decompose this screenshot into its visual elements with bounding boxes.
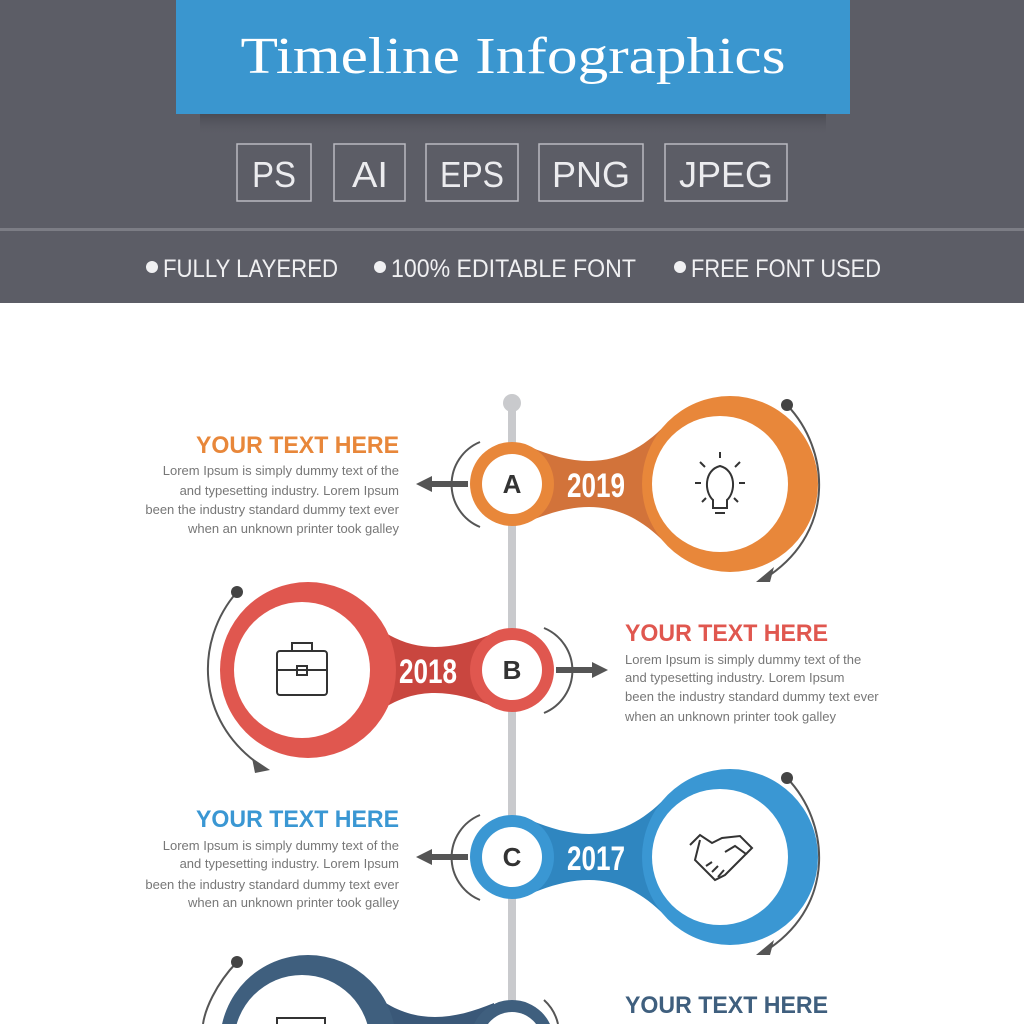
step D	[203, 955, 558, 1024]
text: C: YOUR TEXT HERE	[196, 806, 399, 833]
text: A: and typesetting industry. Lorem Ipsum	[180, 483, 399, 498]
text: C: Lorem Ipsum is simply dummy text of the	[163, 838, 399, 853]
text: A	[145, 432, 400, 536]
format boxes: EPS	[440, 154, 504, 195]
icon: handshake	[690, 835, 752, 880]
step A 2019: A	[503, 469, 522, 499]
feature bullets	[146, 255, 881, 283]
format boxes: PNG	[552, 154, 630, 195]
text: D: YOUR TEXT HERE	[625, 992, 828, 1019]
feature bullets: FULLY LAYERED	[163, 255, 338, 283]
icon: bulb	[695, 452, 745, 513]
format boxes: AI	[352, 154, 388, 195]
step C 2017: 2017	[567, 840, 625, 878]
text: B: YOUR TEXT HERE	[625, 620, 828, 647]
header background	[0, 0, 1024, 303]
format boxes: PS	[252, 154, 296, 195]
text: B: been the industry standard dummy text ever	[625, 689, 879, 704]
feature bullets: FREE FONT USED	[691, 255, 881, 283]
text: C	[145, 806, 400, 910]
title banner: Timeline Infographics	[240, 28, 786, 85]
text: A: YOUR TEXT HERE	[196, 432, 399, 459]
step B 2018: 2018	[399, 653, 457, 691]
vertical timeline line	[503, 394, 521, 1024]
text: B: when an unknown printer took galley	[624, 709, 837, 724]
text: B: Lorem Ipsum is simply dummy text of the	[625, 652, 861, 667]
step A 2019	[416, 396, 819, 582]
step B 2018: B	[503, 655, 521, 685]
text: C: and typesetting industry. Lorem Ipsum	[180, 856, 399, 871]
text: A: Lorem Ipsum is simply dummy text of the	[163, 463, 399, 478]
text: A: been the industry standard dummy text ever	[145, 502, 400, 517]
feature bullets: 100% EDITABLE FONT	[391, 255, 636, 283]
format boxes	[237, 144, 787, 201]
step C 2017	[416, 769, 819, 955]
text: B: and typesetting industry. Lorem Ipsum	[625, 670, 844, 685]
format boxes: JPEG	[679, 154, 773, 195]
text: C: been the industry standard dummy text ever	[145, 877, 400, 892]
text: A: when an unknown printer took galley	[187, 521, 399, 536]
text: B	[624, 620, 879, 724]
step C 2017: C	[503, 842, 522, 872]
step B 2018	[208, 582, 608, 773]
text: C: when an unknown printer took galley	[187, 895, 399, 910]
icon: briefcase	[277, 643, 327, 695]
step A 2019: 2019	[567, 467, 625, 505]
title banner	[176, 0, 850, 136]
